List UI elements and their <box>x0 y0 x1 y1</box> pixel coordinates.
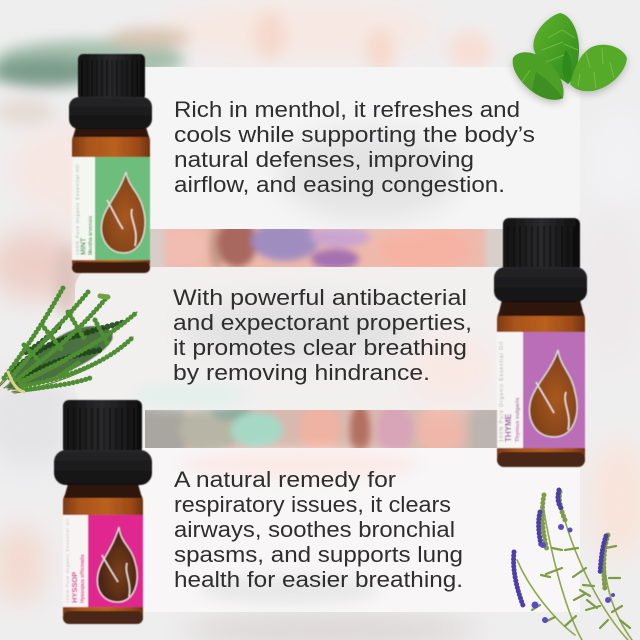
bottle: thyme: THYME <box>504 413 513 442</box>
bottle: hyssop: Hyssopus officinalis <box>80 554 86 603</box>
text: hyssop description: health for easier breathing. <box>174 567 463 592</box>
bottle: mint: Mentha arvensis <box>88 216 94 255</box>
bottle: mint: 100% Pure Organic Essential Oil <box>75 165 80 255</box>
text: hyssop description: airways, soothes bronchial <box>174 517 455 542</box>
bottle: thyme: 100% Pure Organic Essential Oil <box>499 342 505 442</box>
text: mint description: airflow, and easing congestion. <box>174 172 505 197</box>
bottle: thyme: Thymus vulgaris <box>515 398 521 442</box>
text: mint description: cools while supporting the body’s <box>174 122 535 147</box>
bottle: thyme <box>494 218 587 467</box>
text: hyssop description: respiratory issues, it clears <box>174 492 451 517</box>
text: hyssop description: A natural remedy for <box>174 467 396 492</box>
text: thyme description: and expectorant properties, <box>173 310 472 335</box>
band: lower colour strip <box>145 410 498 448</box>
bottle: hyssop <box>54 400 152 624</box>
text: thyme description: it promotes clear breathing <box>173 335 467 360</box>
icon: mint leaves <box>513 13 627 100</box>
panel: mint text background <box>140 67 580 229</box>
bottle: mint: MINT <box>80 237 88 255</box>
text: mint description: Rich in menthol, it refreshes and <box>174 97 520 122</box>
text: thyme description: by removing hindrance. <box>173 360 430 385</box>
panel: thyme text background <box>75 267 500 410</box>
text: hyssop description: spasms, and supports lung <box>174 542 463 567</box>
text: mint description: natural defenses, improving <box>174 147 474 172</box>
panel: hyssop text background <box>140 448 580 612</box>
bottle: mint <box>69 54 152 273</box>
bottle: hyssop: 100% Pure Organic Essential Oil <box>65 519 70 603</box>
text: mint description <box>174 97 535 197</box>
icon: thyme sprig <box>0 288 137 393</box>
text: hyssop description <box>174 467 463 592</box>
text: thyme description <box>173 285 472 385</box>
text: thyme description: With powerful antibacterial <box>173 285 467 310</box>
bottle: hyssop: HYSSOP <box>70 572 79 603</box>
icon: hyssop flowers <box>514 490 632 640</box>
band: upper colour strip <box>149 229 504 267</box>
